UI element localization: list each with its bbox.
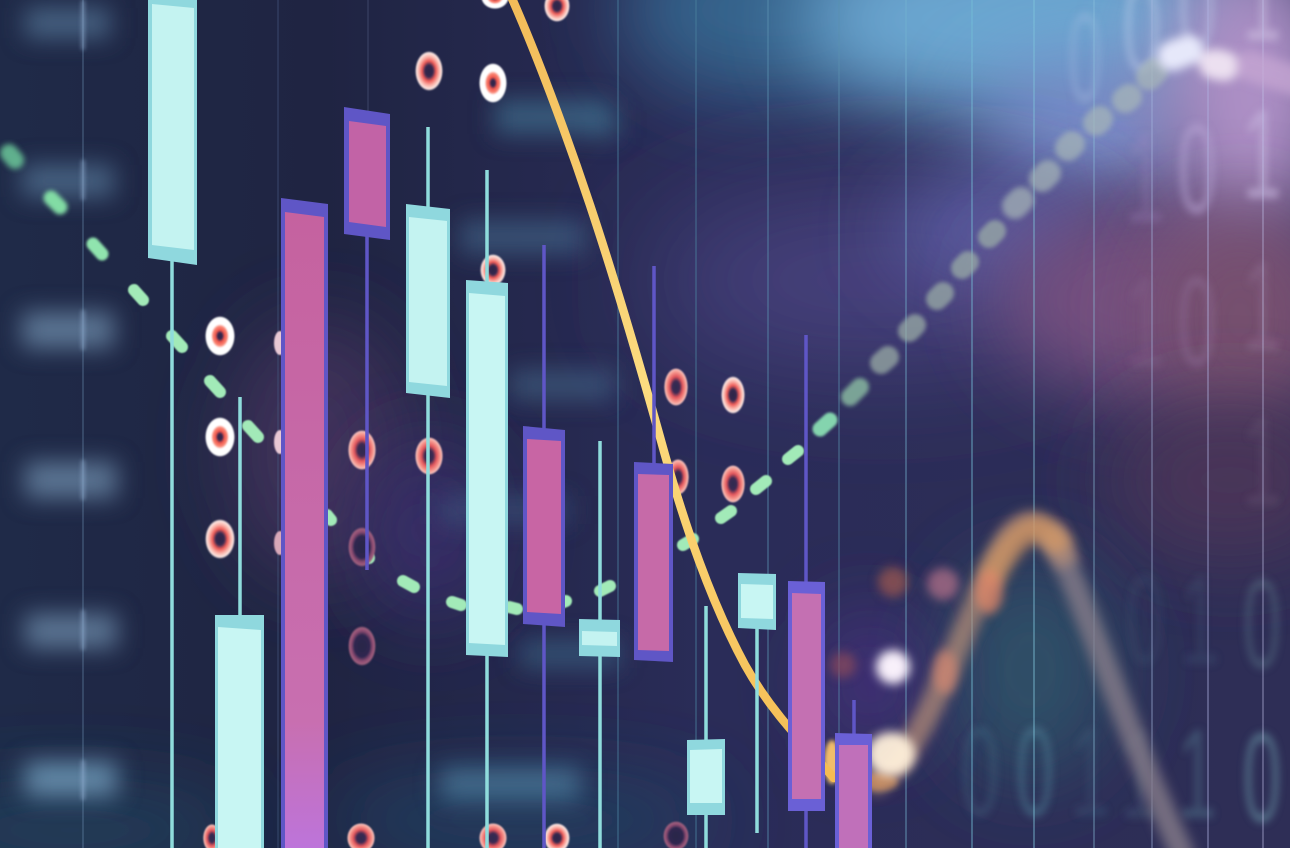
red and white circle markers bbox=[203, 0, 745, 848]
blurred binary digits: 0 bbox=[1242, 552, 1282, 695]
purple candle 4 bbox=[634, 462, 673, 662]
purple candle 6 bbox=[835, 733, 872, 848]
green dotted trend line bbox=[9, 50, 1290, 609]
purple candle 5 bbox=[788, 581, 825, 811]
blurred binary digits: 1 bbox=[1242, 234, 1282, 377]
blurred binary digits: 1 bbox=[1125, 106, 1165, 249]
blurred binary digits: 0 bbox=[1177, 97, 1217, 240]
blurred binary digits: 0 bbox=[1177, 250, 1217, 393]
light candle 1 bbox=[148, 0, 197, 265]
candle wicks bbox=[172, 127, 854, 848]
light candle 4 bbox=[466, 280, 508, 657]
yellow falling curve bbox=[510, 0, 834, 778]
blurred binary digits: 1 bbox=[1120, 702, 1160, 845]
blurred markers bbox=[830, 567, 959, 684]
blurred binary digits: 0 bbox=[1125, 548, 1165, 691]
light candle 3 bbox=[406, 204, 450, 398]
light candle 5 bbox=[579, 619, 620, 657]
blurred binary digits: 1 bbox=[1242, 82, 1282, 225]
light candle 2 bbox=[215, 615, 264, 848]
purple candle 3 bbox=[523, 426, 565, 627]
purple candle 2 bbox=[344, 107, 390, 240]
light candle 7 bbox=[738, 573, 776, 630]
blurred binary digits: 1 bbox=[1180, 548, 1220, 691]
light candle 6 bbox=[687, 739, 725, 815]
blurred binary digits: 0 bbox=[960, 700, 1000, 843]
blurred orange curve bbox=[824, 523, 1185, 848]
blurred binary digits bbox=[960, 0, 1282, 848]
blurred binary digits: 1 bbox=[1242, 389, 1282, 532]
blurred binary digits: 1 bbox=[1125, 250, 1165, 393]
blurred binary digits: 1 bbox=[1177, 702, 1217, 845]
blurred binary digits: 0 bbox=[1015, 700, 1055, 843]
purple candle 1 bbox=[281, 198, 328, 848]
blurred binary digits: 1 bbox=[1070, 700, 1110, 843]
blurred binary digits: 0 bbox=[1242, 706, 1282, 848]
blurred background data labels bbox=[22, 8, 620, 800]
